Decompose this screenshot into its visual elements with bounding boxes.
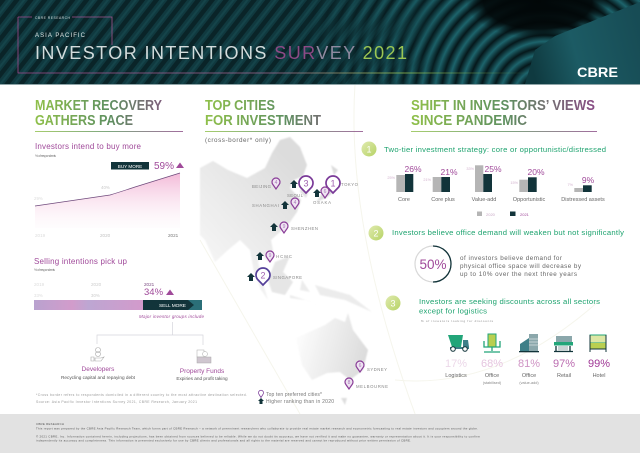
section 2 heading: 2 bbox=[373, 228, 379, 238]
chart: selling intentions bar: 30% bbox=[91, 293, 100, 298]
bar chart: investment strategy: Core plus bbox=[431, 197, 455, 203]
callout: buy more 59%: 59% bbox=[154, 161, 174, 172]
section 3 heading: % of investors looking for discounts bbox=[421, 319, 494, 323]
bar chart: investment strategy: Core bbox=[398, 197, 410, 203]
map legend: Top ten preferred cities* bbox=[266, 392, 322, 398]
bar chart: investment strategy: 21% bbox=[423, 178, 432, 182]
chart: buy intention area chart: 40% bbox=[101, 185, 110, 190]
sector labels bbox=[445, 373, 605, 385]
panel: market recovery bbox=[34, 98, 247, 404]
text: property funds: Expiries and profit taking bbox=[176, 376, 228, 381]
city pins: 9 bbox=[283, 224, 286, 230]
sector labels: (stabilised) bbox=[483, 381, 502, 385]
heading: shift in views: SHIFT IN INVESTORS’ VIEWS bbox=[411, 98, 595, 114]
city pins: 9 bbox=[269, 253, 272, 259]
chart: selling intentions bar bbox=[34, 282, 202, 310]
chart: selling intentions bar: 33% bbox=[34, 293, 43, 298]
sector labels: Retail bbox=[557, 373, 571, 379]
map legend: Higher ranking than in 2020 bbox=[266, 399, 334, 405]
bar chart: investment strategy: Distressed assets bbox=[561, 197, 605, 203]
city labels: TOKYO bbox=[341, 182, 359, 187]
bar chart: investment strategy: 20% bbox=[527, 167, 545, 177]
footer: independently its accuracy and completeness. This information is presented exclusively for use by CBRE clients and professionals and all rights to the material are reserved and cannot be reproduced without prior written permission of CBRE. bbox=[36, 438, 411, 442]
subheading: buy more: % of respondents bbox=[35, 154, 56, 158]
section 3 heading bbox=[386, 296, 600, 323]
chart: buy intention area chart: 29% bbox=[34, 196, 43, 201]
footer: CBRE RESEARCH bbox=[36, 422, 64, 426]
city pins: 8 bbox=[348, 380, 351, 386]
footnote bbox=[36, 393, 247, 404]
bar chart: investment strategy: 25% bbox=[387, 176, 396, 180]
city labels: SHANGHAI bbox=[252, 203, 279, 208]
city pins: 2 bbox=[260, 270, 266, 280]
heading: shift in views bbox=[411, 98, 597, 132]
section 3 heading: Investors are seeking discounts across all sectors bbox=[419, 297, 600, 306]
bar chart: investment strategy: 33% bbox=[466, 167, 475, 171]
chart: selling intentions bar: 2021 bbox=[144, 282, 155, 287]
city labels: OSAKA bbox=[313, 200, 331, 205]
chart: selling intentions bar: 2020 bbox=[91, 282, 102, 287]
heading: shift in views: SINCE PANDEMIC bbox=[411, 113, 527, 129]
city pins: 6 bbox=[324, 189, 327, 195]
city pins: 3 bbox=[303, 178, 309, 188]
map: asia and australia bbox=[200, 137, 372, 405]
city labels: SEOUL bbox=[287, 193, 304, 198]
chart: selling intentions bar: 2019 bbox=[34, 282, 45, 287]
subheading: selling: % of respondents bbox=[34, 268, 55, 272]
bar chart: investment strategy: 21% bbox=[440, 167, 458, 177]
icon: office chair bbox=[484, 334, 500, 352]
discount percentages: 81% bbox=[518, 358, 540, 370]
text: office demand: of investors believe demand for bbox=[460, 255, 562, 262]
sector labels: Office bbox=[522, 373, 536, 379]
sector labels: Office bbox=[485, 373, 499, 379]
subheading: buy more: Investors intend to buy more bbox=[35, 142, 142, 151]
chart: selling intentions bar: 34% bbox=[144, 287, 164, 298]
text: developers: Developers bbox=[82, 366, 115, 373]
bar chart: investment strategy: 2020 bbox=[486, 212, 496, 217]
donut: 50%: 50% bbox=[419, 257, 447, 272]
heading: top cities: (cross-border* only) bbox=[205, 137, 271, 144]
section 1 heading: 1 bbox=[366, 144, 372, 154]
discount percentages: 97% bbox=[553, 358, 575, 370]
heading: market recovery: GATHERS PACE bbox=[35, 113, 133, 129]
city labels: SYDNEY bbox=[367, 367, 387, 372]
title bbox=[35, 16, 407, 63]
higher ranking arrows bbox=[247, 180, 321, 281]
bar chart: investment strategy: Value-add bbox=[472, 197, 496, 203]
icon: retail bbox=[554, 336, 573, 352]
section 1 heading: Two-tier investment strategy: core or opportunistic/distressed bbox=[384, 145, 606, 154]
bar chart: investment strategy: 7% bbox=[568, 183, 574, 187]
section 3 heading: 3 bbox=[390, 298, 396, 308]
bar chart: investment strategy: 25% bbox=[484, 164, 502, 174]
title: CBRE RESEARCH bbox=[35, 16, 71, 20]
callout: buy more 59%: BUY MORE bbox=[118, 164, 142, 169]
sector labels: Hotel bbox=[593, 373, 605, 379]
chart: buy intention area chart: 2020 bbox=[100, 233, 111, 238]
section 1 heading bbox=[362, 142, 606, 156]
connector lines bbox=[97, 322, 203, 345]
city pins: 1 bbox=[330, 178, 336, 188]
city labels: MELBOURNE bbox=[356, 384, 388, 389]
footnote: *Cross border refers to respondents domiciled in a different country to the most attractive destination selected. bbox=[36, 393, 247, 397]
icon: property funds bbox=[197, 350, 211, 363]
text: developers: Recycling capital and repaying debt bbox=[61, 375, 136, 380]
heading: top cities bbox=[205, 98, 363, 144]
callout: buy more 59% bbox=[111, 161, 184, 172]
bar chart: investment strategy: 2021 bbox=[520, 212, 530, 217]
bar chart: investment strategy bbox=[387, 164, 605, 217]
title: INVESTOR INTENTIONS SURVEY 2021 bbox=[35, 43, 407, 63]
text: major investor groups: Major investor groups include bbox=[139, 314, 204, 319]
city pins: 4 bbox=[275, 180, 278, 186]
footnote: Source: Asia Pacific Investor Intentions Survey 2021, CBRE Research, January 2021 bbox=[36, 400, 197, 404]
city labels bbox=[252, 182, 388, 389]
sector labels: (value-add) bbox=[519, 381, 539, 385]
heading: market recovery: MARKET RECOVERY bbox=[35, 98, 162, 114]
panel: shift in investors' views bbox=[362, 98, 624, 385]
icon: office building bbox=[519, 334, 539, 352]
city labels: SINGAPORE bbox=[273, 275, 302, 280]
panel: top cities map bbox=[200, 98, 388, 405]
city labels: SHENZHEN bbox=[291, 226, 318, 231]
footer: This report was prepared by the CBRE Asia Pacific Research Team, which forms part of CBRE Research – a network of preeminent researchers who collaborate to provide real estate market research and econometric forecasting to real estate investors and occupiers around the globe. bbox=[36, 426, 478, 430]
footer bbox=[0, 414, 640, 453]
chart: selling intentions bar: SELL MORE bbox=[159, 303, 186, 309]
city labels: HCMC bbox=[276, 254, 292, 259]
discount percentages: 68% bbox=[481, 358, 503, 370]
header banner bbox=[0, 0, 640, 85]
section 2 heading: Investors believe office demand will weaken but not significantly bbox=[392, 228, 624, 237]
city pins: 6 bbox=[359, 363, 362, 369]
icon: logistics truck bbox=[448, 335, 469, 351]
text: developers bbox=[61, 366, 136, 380]
subheading: selling: Selling intentions pick up bbox=[34, 257, 128, 266]
heading: market recovery bbox=[35, 98, 183, 132]
heading: top cities: TOP CITIES bbox=[205, 98, 275, 114]
text: office demand: up to 10% over the next three years bbox=[460, 271, 577, 278]
subheading: buy more bbox=[35, 142, 142, 158]
donut: 50% bbox=[415, 246, 451, 282]
subheading: selling bbox=[34, 257, 128, 272]
title: ASIA PACIFIC bbox=[35, 33, 86, 39]
sector labels: Logistics bbox=[445, 373, 467, 379]
chart: buy intention area chart: 2019 bbox=[35, 233, 46, 238]
city pins bbox=[256, 176, 364, 389]
chart: buy intention area chart: 2021 bbox=[168, 233, 179, 238]
text: office demand bbox=[460, 255, 582, 278]
discount percentages: 99% bbox=[588, 358, 610, 370]
CBRE logo: CBRE bbox=[577, 65, 618, 80]
text: property funds: Property Funds bbox=[180, 368, 225, 375]
icon: developers bbox=[91, 348, 104, 361]
city labels: BEIJING bbox=[252, 184, 272, 189]
discount percentages bbox=[445, 358, 610, 370]
icon: hotel bed bbox=[590, 335, 606, 352]
footer: © 2021 CBRE, Inc. Information contained herein, including projections, has been obtained from sources believed to be reliable. While we do not doubt its accuracy, we have not verified it and make no guarantee, warranty or representation about it. It is your responsibility to confirm bbox=[36, 434, 481, 438]
city pins: 4 bbox=[294, 200, 297, 206]
discount percentages: 17% bbox=[445, 358, 467, 370]
bar chart: investment strategy: 26% bbox=[404, 164, 422, 174]
bar chart: investment strategy: 9% bbox=[582, 175, 595, 185]
text: office demand: physical office space will decrease by bbox=[460, 263, 582, 270]
bar chart: investment strategy: 15% bbox=[510, 181, 519, 185]
text: property funds bbox=[176, 368, 228, 381]
map legend bbox=[258, 390, 334, 405]
section 3 heading: except for logistics bbox=[419, 306, 487, 316]
chart: buy intention area chart bbox=[34, 173, 180, 238]
heading: top cities: FOR INVESTMENT bbox=[205, 113, 321, 129]
bar chart: investment strategy: Opportunistic bbox=[513, 197, 545, 203]
section 2 heading bbox=[368, 226, 624, 240]
